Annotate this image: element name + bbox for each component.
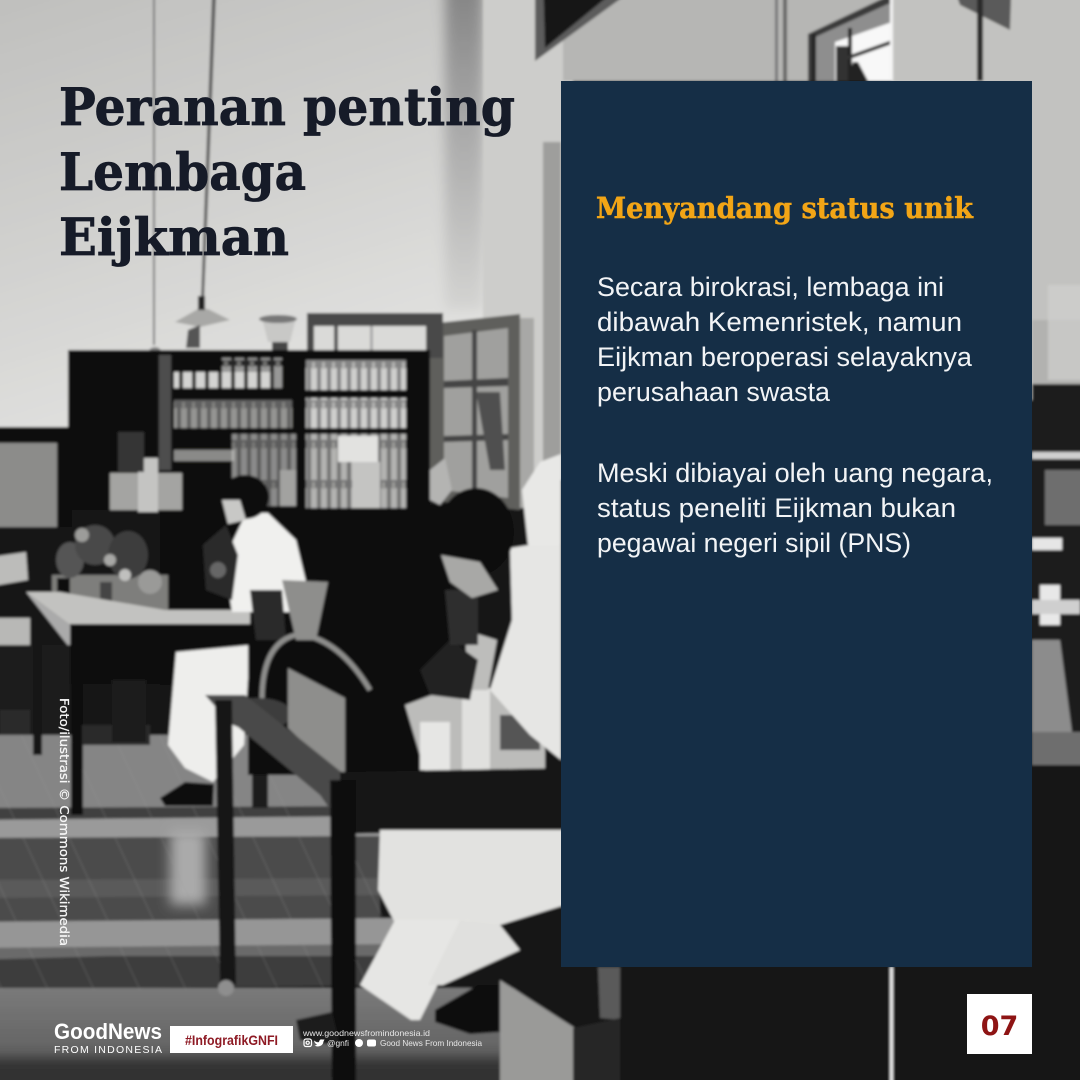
microscope — [420, 640, 478, 700]
seated man, first — [224, 513, 308, 612]
icon: instagram — [304, 1039, 312, 1046]
title: Eijkman — [59, 208, 289, 268]
social links: @gnfi — [327, 1038, 349, 1048]
dark cabinet — [68, 350, 430, 510]
page number — [967, 994, 1032, 1054]
standing figure edge — [522, 454, 561, 545]
left table legs and stools — [33, 620, 42, 755]
paragraph 1: Eijkman beroperasi selayaknya — [597, 342, 973, 372]
panel: main text — [561, 81, 1032, 967]
trousers and legs — [378, 830, 565, 925]
social links — [302, 1028, 482, 1048]
foreground table — [205, 695, 345, 830]
photo credit, vertical: Foto/ilustrasi © Commons Wikimedia — [57, 698, 72, 946]
icon: twitter — [314, 1039, 324, 1046]
hashtag badge: #InfografikGNFI — [185, 1033, 278, 1048]
top window behind cabinet — [307, 313, 443, 358]
social links: www.goodnewsfromindonesia.id — [302, 1028, 430, 1038]
icon: youtube — [367, 1040, 376, 1046]
items on foreground table — [405, 690, 545, 772]
open door — [428, 314, 520, 510]
logo: GoodNews From Indonesia: GoodNews — [54, 1019, 162, 1044]
right frame top — [948, 0, 1012, 30]
shelves with bottles — [174, 358, 452, 508]
plants on left table — [52, 525, 168, 611]
panel heading: Menyandang status unik — [596, 191, 974, 225]
foreground man — [490, 540, 561, 760]
lamps — [175, 309, 230, 327]
paragraph 1: perusahaan swasta — [597, 377, 831, 407]
page number: 07 — [981, 1011, 1018, 1042]
left person arm — [0, 552, 28, 590]
paragraph 1: Secara birokrasi, lembaga ini — [597, 272, 944, 302]
floor — [0, 735, 390, 810]
paragraph 2: pegawai negeri sipil (PNS) — [597, 528, 911, 558]
left table top — [26, 592, 250, 625]
white strip bottom — [893, 967, 1080, 1080]
logo: GoodNews From Indonesia — [54, 1019, 162, 1056]
title: Lembaga — [59, 143, 306, 203]
window top — [808, 0, 892, 81]
paragraph 1 — [597, 272, 973, 407]
icon: facebook — [355, 1039, 363, 1047]
waste basket — [494, 967, 620, 1030]
paragraph 2: Meski dibiayai oleh uang negara, — [597, 458, 993, 488]
picture frame top — [535, 0, 660, 61]
hashtag badge — [170, 1026, 293, 1053]
pot on cabinet — [110, 473, 182, 510]
title: Peranan penting — [59, 78, 515, 138]
logo: GoodNews From Indonesia: FROM INDONESIA — [54, 1044, 162, 1056]
social links: Good News From Indonesia — [380, 1038, 482, 1048]
paragraph 2: status peneliti Eijkman bukan — [597, 493, 956, 523]
title — [59, 78, 515, 268]
paragraph 1: dibawah Kemenristek, namun — [597, 307, 962, 337]
paragraph 2 — [597, 458, 993, 558]
foreground equipment — [282, 580, 328, 640]
walls — [0, 0, 485, 440]
hanging cords — [153, 0, 155, 345]
right side shelves — [1032, 320, 1080, 384]
dark middle background — [248, 640, 448, 775]
